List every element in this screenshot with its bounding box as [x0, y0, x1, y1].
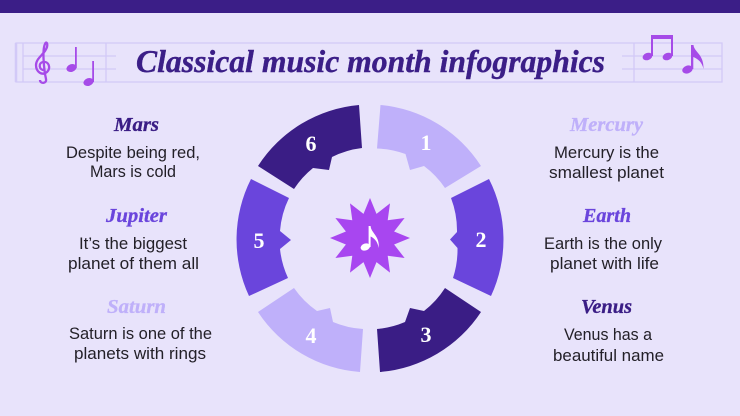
segment 1: 1	[420, 130, 432, 155]
center star with note	[330, 198, 410, 278]
segment 3: 3	[420, 322, 432, 347]
segment 5	[237, 179, 291, 296]
text block: Jupiter	[68, 205, 199, 273]
text block: Mercury	[549, 114, 664, 182]
text block: Jupiter: Jupiter	[105, 205, 167, 227]
segment 2	[450, 179, 503, 296]
text block: Venus: beautiful name	[553, 347, 664, 365]
segment 4: 4	[306, 323, 316, 348]
text block: Earth	[544, 205, 663, 273]
text block: Venus: Venus	[581, 296, 632, 318]
segment 5: 5	[254, 228, 264, 253]
text block: Jupiter: It’s the biggest	[79, 235, 187, 253]
segment 2: 2	[476, 227, 486, 252]
segment 4	[258, 288, 363, 372]
text block: Saturn: Saturn	[107, 296, 166, 318]
segment 6	[258, 105, 362, 189]
text block: Mars: Mars	[113, 114, 159, 136]
text block: Mercury: smallest planet	[549, 164, 664, 182]
icon: quarter notes left	[65, 47, 95, 87]
text block: Mars: Despite being red,	[66, 144, 200, 162]
text block: Saturn: planets with rings	[74, 345, 206, 363]
text block: Mercury: Mercury is the	[554, 144, 659, 162]
title: Classical music month infographics	[136, 43, 605, 79]
text block: Mercury: Mercury	[569, 114, 643, 136]
text block: Earth: Earth	[582, 205, 631, 227]
segment 1	[377, 105, 481, 188]
text block: Saturn	[69, 296, 212, 363]
text block: Mars: Mars is cold	[90, 163, 176, 181]
text block: Venus: Venus has a	[564, 326, 653, 344]
text block: Earth: Earth is the only	[544, 235, 663, 253]
icon: beamed and eighth notes right	[642, 35, 704, 75]
top bar	[0, 0, 740, 13]
icon: treble clef	[36, 43, 49, 83]
text block: Venus	[553, 296, 664, 365]
text block: Earth: planet with life	[550, 255, 659, 273]
music staff banner	[16, 43, 722, 82]
text block: Saturn: Saturn is one of the	[69, 325, 212, 343]
text block: Jupiter: planet of them all	[68, 255, 199, 273]
segment 6: 6	[306, 131, 316, 156]
segment 3	[377, 288, 481, 372]
text block: Mars	[66, 114, 200, 181]
